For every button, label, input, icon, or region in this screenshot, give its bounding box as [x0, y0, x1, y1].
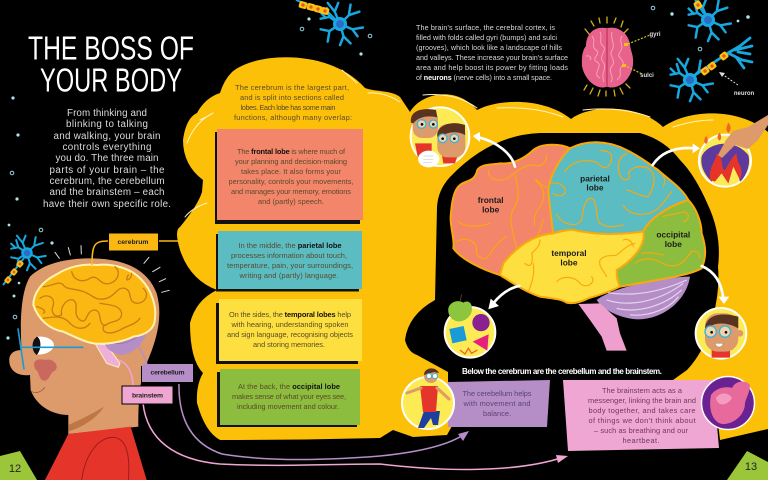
- text: cerebrum intro: The cerebrum is the largest part,: [235, 83, 349, 92]
- illustration: small pink brain: [582, 17, 650, 96]
- panel: frontal lobe: takes place. It also forms your: [241, 167, 342, 176]
- page number 13: 13: [745, 461, 757, 473]
- panel: occipital lobe: At the back, the occipital lobe: [238, 382, 340, 391]
- intro text block: controls everything: [62, 142, 152, 153]
- panel: occipital lobe: [217, 369, 360, 427]
- text: below the cerebrum: Below the cerebrum are the cerebellum and the brainstem.: [462, 367, 662, 376]
- label: brainstem: [122, 386, 173, 404]
- shirt: [45, 427, 147, 480]
- title: THE BOSS OF: [28, 30, 194, 66]
- occipital lobe: [617, 200, 705, 287]
- label: neuron: [719, 72, 754, 97]
- brain stem: [95, 343, 120, 367]
- top right neuron: [689, 0, 731, 41]
- skin: [9, 258, 159, 434]
- lobe labels: frontal: [478, 195, 504, 205]
- text: cerebrum intro: and is split into sections called: [240, 93, 344, 102]
- illustration: head with brain: [9, 246, 169, 480]
- intro text block: cerebrum, the cerebellum: [50, 176, 164, 187]
- intro text block: have their own specific role.: [43, 199, 171, 210]
- panel: cerebellum: with movement and: [462, 399, 530, 408]
- label: neuron: neuron: [734, 91, 754, 97]
- cerebellum: [597, 277, 690, 319]
- panel: brainstem: body together, and takes care: [588, 406, 696, 415]
- panel: parietal lobe: In the middle, the parietal lobe: [238, 241, 342, 250]
- panel: frontal lobe: and manages your memory, emotions: [231, 187, 351, 196]
- decorative dots: [6, 6, 750, 340]
- title: [28, 30, 194, 98]
- leader lines to lower boxes: [118, 345, 568, 470]
- panel: brainstem: of things we don't think about: [588, 416, 696, 425]
- intro text block: blinking to talking: [66, 119, 148, 130]
- panel: temporal lobe: and storing memories.: [253, 340, 325, 349]
- text: cerebral cortex: The brain's surface, the cerebral cortex, is: [416, 23, 555, 32]
- panel: parietal lobe: processes information about touch,: [231, 251, 347, 260]
- panel: temporal lobe: On the sides, the temporal lobes help: [229, 310, 351, 319]
- cheek: [34, 359, 57, 381]
- neck shadow: [68, 407, 104, 432]
- lobe labels: lobe: [665, 239, 682, 249]
- panel: occipital lobe: makes sense of what your eyes see,: [232, 392, 346, 401]
- text: cerebral cortex: (grooves), which look like a landscape of hills: [416, 43, 562, 52]
- lobe labels: lobe: [560, 258, 578, 268]
- lobe labels: temporal: [551, 248, 587, 258]
- icon: heart circle: [702, 376, 754, 430]
- mouth: [31, 387, 45, 393]
- label: cerebellum: cerebellum: [150, 370, 184, 376]
- panel: cerebellum: balance.: [483, 409, 511, 418]
- panel: frontal lobe: The frontal lobe is where much of: [237, 147, 346, 156]
- text: cerebral cortex: area and help boost its power by fitting loads: [416, 63, 568, 72]
- brainstem: [578, 303, 627, 351]
- panel: temporal lobe: [216, 299, 362, 364]
- label: cerebellum: [141, 364, 193, 384]
- left neuron: [3, 236, 46, 285]
- illustration: lobed brain: [411, 107, 751, 359]
- panel: brainstem: [563, 380, 719, 451]
- label: sulci: sulci: [640, 73, 654, 79]
- frontal lobe: [451, 145, 570, 275]
- lobe labels: [478, 173, 690, 268]
- panel: frontal lobe: and (partly) speech.: [258, 197, 324, 206]
- panel: parietal lobe: temperature, pain, your surroundings,: [227, 261, 353, 270]
- small flames: [704, 123, 731, 144]
- panel: temporal lobe: and sign language, recognising objects: [227, 330, 353, 339]
- text: cerebral cortex: and valleys. These increase your brain's surface: [416, 53, 568, 62]
- parietal lobe: [548, 142, 688, 234]
- panel: frontal lobe: personality, controls your movements,: [228, 177, 354, 186]
- thought rays: [55, 246, 169, 292]
- circle: objects: [445, 294, 495, 358]
- panel: occipital lobe: including movement and colour.: [237, 402, 339, 411]
- panel: cerebellum: [448, 380, 550, 427]
- panel: brainstem: messenger, linking the brain and: [588, 396, 696, 405]
- panel: brainstem: The brainstem acts as a: [602, 386, 683, 395]
- cloud highlights: [185, 70, 713, 217]
- page number 12: [0, 451, 37, 480]
- label: gyri: gyri: [649, 32, 661, 38]
- text: cerebral cortex: of neurons (nerve cells) into a small space.: [416, 73, 552, 82]
- panel: yellow cloud background: [177, 57, 768, 440]
- panel: frontal lobe: [215, 129, 363, 224]
- circle: hot flames: [699, 135, 751, 187]
- intro text block: and walking, your brain: [54, 131, 160, 142]
- panel: parietal lobe: [216, 231, 362, 292]
- intro text block: parts of your brain – the: [50, 165, 165, 176]
- glasses: [18, 328, 83, 369]
- text: cerebral cortex: [416, 23, 568, 82]
- lower right neuron: [671, 38, 752, 101]
- text: cerebrum intro: [234, 83, 352, 122]
- title: YOUR BODY: [40, 62, 182, 98]
- top centre neuron: [296, 0, 363, 45]
- intro text block: From thinking and: [67, 108, 147, 119]
- panel: frontal lobe: your planning and decision-making: [235, 157, 347, 166]
- label: cerebrum: cerebrum: [118, 239, 148, 246]
- panel: brainstem: heartbeat.: [622, 436, 660, 445]
- icon: running child circle: [402, 368, 454, 429]
- brain: [33, 265, 155, 344]
- label: cerebrum: [92, 233, 180, 265]
- panel: temporal lobe: with hearing, understanding spoken: [230, 320, 348, 329]
- lobe labels: occipital: [656, 229, 690, 239]
- intro text block: and the brainstem – each: [50, 187, 164, 198]
- page number 12: 12: [9, 463, 21, 475]
- lobe labels: lobe: [586, 183, 604, 193]
- label: brainstem: brainstem: [132, 392, 163, 400]
- panel: parietal lobe: writing and (partly) language.: [238, 271, 338, 280]
- intro text block: [43, 108, 171, 210]
- intro text block: you do. The three main: [56, 153, 158, 164]
- text: cerebrum intro: lobes. Each lobe has some main: [240, 103, 336, 112]
- eye: [35, 337, 54, 354]
- text: cerebrum intro: functions, although many overlap:: [234, 113, 352, 122]
- circle: two children talking: [411, 107, 469, 167]
- white arrows: [473, 132, 729, 309]
- circle: boy face: [696, 308, 746, 359]
- cerebellum: [103, 332, 147, 355]
- lobe labels: lobe: [482, 205, 500, 215]
- lobe labels: parietal: [580, 173, 610, 183]
- temporal lobe: [500, 230, 644, 303]
- hand pointing: [718, 115, 768, 158]
- panel: cerebellum: The cerebellum helps: [462, 389, 532, 398]
- panel: brainstem: – such as breathing and our: [594, 426, 689, 435]
- text: cerebral cortex: filled with folds called gyri (bumps) and sulci: [416, 33, 557, 42]
- page number 13: [727, 451, 768, 480]
